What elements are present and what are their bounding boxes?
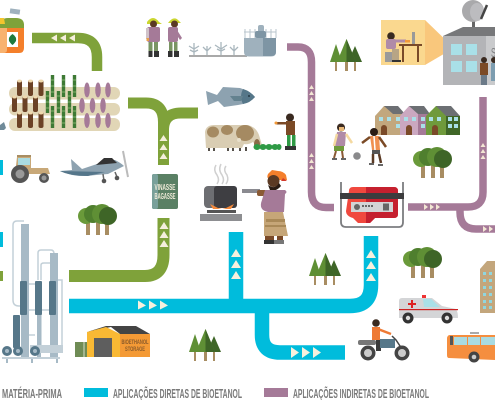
icon: ambulance bbox=[399, 295, 458, 324]
icon: bioethanol storage bbox=[75, 326, 150, 357]
arrows on green top pipe bbox=[51, 34, 75, 42]
icon: tractor bbox=[11, 155, 50, 183]
icon: worker 1 bbox=[146, 18, 162, 57]
pipe: raw material, green top bbox=[32, 38, 97, 71]
sugarcane bbox=[46, 75, 76, 128]
arrows on cyan pipes bbox=[138, 249, 376, 358]
icon: fish bbox=[206, 87, 255, 107]
arrows on green T pipe bbox=[160, 135, 168, 159]
icon: crop plane bbox=[60, 151, 128, 183]
icon: child 1 with ball bbox=[332, 124, 361, 160]
icon: irrigation seedlings bbox=[189, 42, 247, 57]
icon: distillery bbox=[2, 221, 63, 363]
icon: child 2 bbox=[362, 128, 386, 165]
icon: bioethanol storage: BIOETHANOL bbox=[122, 339, 149, 346]
icon: water treatment tank bbox=[244, 25, 276, 56]
icon: trees bbox=[413, 147, 452, 178]
icon: motorcycle rider bbox=[358, 319, 410, 360]
icon: trees bbox=[403, 247, 442, 278]
icon: cows bbox=[205, 125, 262, 151]
icon: bus bbox=[447, 332, 495, 362]
pipe: raw material, green T junction bbox=[128, 103, 198, 165]
icon: stone at left edge bbox=[0, 122, 6, 130]
pipe: indirect applications, purple bbox=[287, 47, 495, 229]
icon: grass bbox=[254, 144, 282, 150]
panel: crop field bbox=[9, 75, 120, 131]
label box: vinasse bagasse bbox=[152, 174, 178, 209]
icon: office building bbox=[443, 27, 495, 85]
legend: direct applications swatch bbox=[84, 388, 108, 397]
icon: satellite dish bbox=[462, 0, 487, 30]
pipe: raw material, green lower bbox=[69, 218, 164, 276]
icon: worker 2 bbox=[168, 18, 182, 57]
icon: cooking pot on stove bbox=[200, 164, 242, 221]
icon: generator bbox=[340, 182, 404, 227]
arrows on purple pipes bbox=[309, 85, 493, 232]
arrows on green lower pipe bbox=[160, 222, 168, 247]
icon: pine trees bbox=[309, 253, 341, 285]
icon: woman cooking bbox=[242, 170, 288, 244]
icon: pine trees bbox=[189, 329, 221, 361]
pipe: direct applications, cyan bbox=[69, 232, 371, 352]
pipe edge stubs at left bbox=[0, 160, 3, 281]
icon: herder bbox=[274, 114, 296, 150]
icon: apartment tower bbox=[480, 261, 495, 313]
label box: vinasse bagasse: BAGASSE bbox=[154, 192, 176, 201]
icon: pine trees bbox=[330, 39, 362, 71]
icon: bioethanol storage: STORAGE bbox=[125, 346, 145, 353]
legend: indirect applications swatch bbox=[264, 388, 288, 397]
purple pods bbox=[79, 82, 111, 128]
panel: person at computer bbox=[381, 20, 454, 65]
label box: vinasse bagasse: VINASSE bbox=[154, 183, 176, 192]
icon: trees bbox=[78, 204, 117, 235]
icon: jar of product bbox=[0, 8, 24, 53]
legend bbox=[2, 386, 429, 400]
icon: row of houses bbox=[375, 106, 460, 135]
wood logs bbox=[12, 80, 44, 128]
